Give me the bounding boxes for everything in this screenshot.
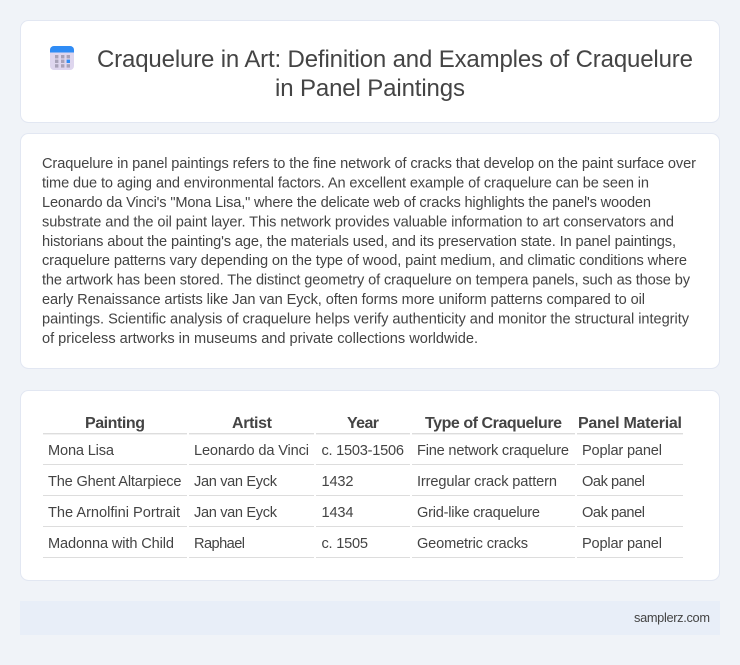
row: The Arnolfini Portrait: The Arnolfini Portrait: [48, 505, 180, 521]
description text: early Renaissance artists like Jan van Eyck, often forms more uniform patterns compared to oil: [42, 292, 645, 308]
table: [43, 415, 683, 558]
row: Mona Lisa: Leonardo da Vinci: [194, 443, 309, 459]
description text: of priceless artworks in museums and private collections worldwide.: [42, 331, 478, 347]
description text: Craquelure in panel paintings refers to the fine network of cracks that develop on the paint surface over: [42, 156, 696, 172]
row: Mona Lisa: [48, 443, 662, 459]
table header: Painting: [85, 415, 145, 432]
row: The Arnolfini Portrait: Jan van Eyck: [194, 505, 278, 521]
panel: title card: [20, 20, 720, 122]
row: The Arnolfini Portrait: [48, 505, 645, 521]
row: Madonna with Child: Madonna with Child: [48, 536, 174, 552]
row: Madonna with Child: c. 1505: [322, 536, 368, 552]
panel: description: [20, 134, 720, 368]
description text: substrate and the oil paint layer. This network provides valuable information to art conservators and: [42, 214, 674, 230]
title: Craquelure in Art: Definition and Examples of Craquelure: [97, 46, 693, 73]
table header: [85, 415, 682, 432]
row: Madonna with Child: [48, 536, 662, 552]
description text: paintings. Scientific analysis of craquelure helps verify authenticity and monitor the structural integrity: [42, 312, 690, 328]
row: The Ghent Altarpiece: Oak panel: [582, 474, 645, 490]
table header: Panel Material: [578, 415, 682, 432]
panel: table card: [20, 390, 720, 580]
table rules: [43, 433, 683, 558]
row: Mona Lisa: Mona Lisa: [48, 443, 115, 459]
description text: craquelure patterns vary depending on the type of wood, paint medium, and climatic conditions where: [42, 253, 687, 269]
row: Madonna with Child: Raphael: [194, 536, 245, 552]
footer source text: samplerz.com: [634, 610, 710, 625]
title: [97, 46, 693, 102]
row: Mona Lisa: Fine network craquelure: [417, 443, 569, 459]
icon: calendar: [50, 46, 74, 70]
row: Mona Lisa: c. 1503-1506: [322, 443, 404, 459]
row: The Ghent Altarpiece: [48, 474, 645, 490]
row: The Arnolfini Portrait: Grid-like craquelure: [417, 505, 540, 521]
table header: Year: [347, 415, 379, 432]
description text: time due to aging and environmental factors. An excellent example of craquelure can be seen in: [42, 175, 649, 191]
row: Mona Lisa: Poplar panel: [582, 443, 662, 459]
row: The Arnolfini Portrait: 1434: [322, 505, 354, 521]
row: Madonna with Child: Poplar panel: [582, 536, 662, 552]
row: The Ghent Altarpiece: Jan van Eyck: [194, 474, 278, 490]
row: The Ghent Altarpiece: Irregular crack pattern: [417, 474, 557, 490]
table header: Type of Craquelure: [425, 415, 562, 432]
description text: [42, 156, 696, 347]
description text: Leonardo da Vinci's "Mona Lisa," where the delicate web of cracks highlights the panel's wooden: [42, 195, 651, 211]
row: The Arnolfini Portrait: Oak panel: [582, 505, 645, 521]
description text: the artwork has been stored. The distinct geometry of craquelure on tempera panels, such as those by: [42, 273, 691, 289]
row: The Ghent Altarpiece: 1432: [322, 474, 354, 490]
row: The Ghent Altarpiece: The Ghent Altarpiece: [48, 474, 182, 490]
description text: historians about the painting's age, the materials used, and its preservation state. In panel paintings,: [42, 234, 676, 250]
row: Madonna with Child: Geometric cracks: [417, 536, 528, 552]
footer: [20, 601, 720, 635]
table header: Artist: [232, 415, 273, 432]
title: in Panel Paintings: [275, 75, 465, 102]
